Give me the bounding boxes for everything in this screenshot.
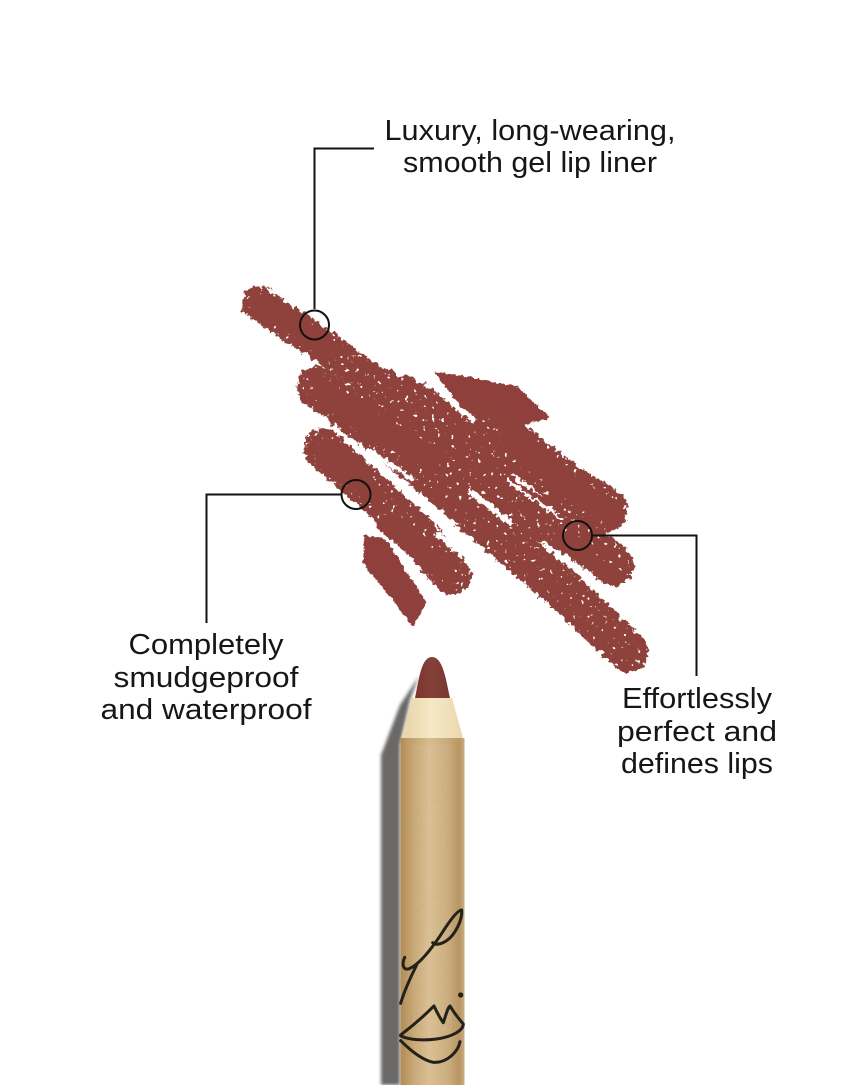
callout text: and waterproof bbox=[100, 694, 313, 726]
callout text: Luxury, long-wearing, bbox=[384, 115, 676, 147]
leader line bbox=[314, 148, 374, 309]
lip liner swatch bbox=[258, 303, 628, 652]
callout text: defines lips bbox=[621, 748, 773, 780]
marker circle bbox=[563, 521, 592, 550]
leader line bbox=[592, 536, 696, 676]
signature dot bbox=[459, 994, 462, 996]
callout text: perfect and bbox=[617, 716, 777, 748]
callout: long-wearing gel liner bbox=[300, 115, 676, 340]
callout text: smooth gel lip liner bbox=[403, 147, 657, 179]
pencil shadow bbox=[381, 676, 419, 1085]
swatch solid pieces bbox=[258, 303, 613, 627]
callout text: Effortlessly bbox=[622, 683, 773, 715]
swatch lower-left piece separation bbox=[364, 537, 425, 625]
callout text: Completely bbox=[128, 629, 284, 661]
swatch textured strokes bbox=[258, 303, 628, 652]
callout text: smudgeproof bbox=[114, 662, 300, 694]
lips outline bbox=[401, 1006, 463, 1062]
gold barrel bbox=[400, 738, 464, 1085]
signature flourish bbox=[401, 910, 462, 1003]
callout: defines lips bbox=[563, 521, 777, 780]
marker circle bbox=[342, 480, 370, 509]
marker circle bbox=[300, 310, 329, 340]
logo signature bbox=[401, 910, 463, 1062]
barrel highlight bbox=[412, 745, 452, 1085]
callout: smudgeproof and waterproof bbox=[100, 480, 370, 726]
pencil wood bbox=[401, 698, 463, 738]
leader line bbox=[206, 494, 341, 623]
pencil bbox=[381, 657, 464, 1085]
pencil lead tip bbox=[415, 657, 450, 698]
